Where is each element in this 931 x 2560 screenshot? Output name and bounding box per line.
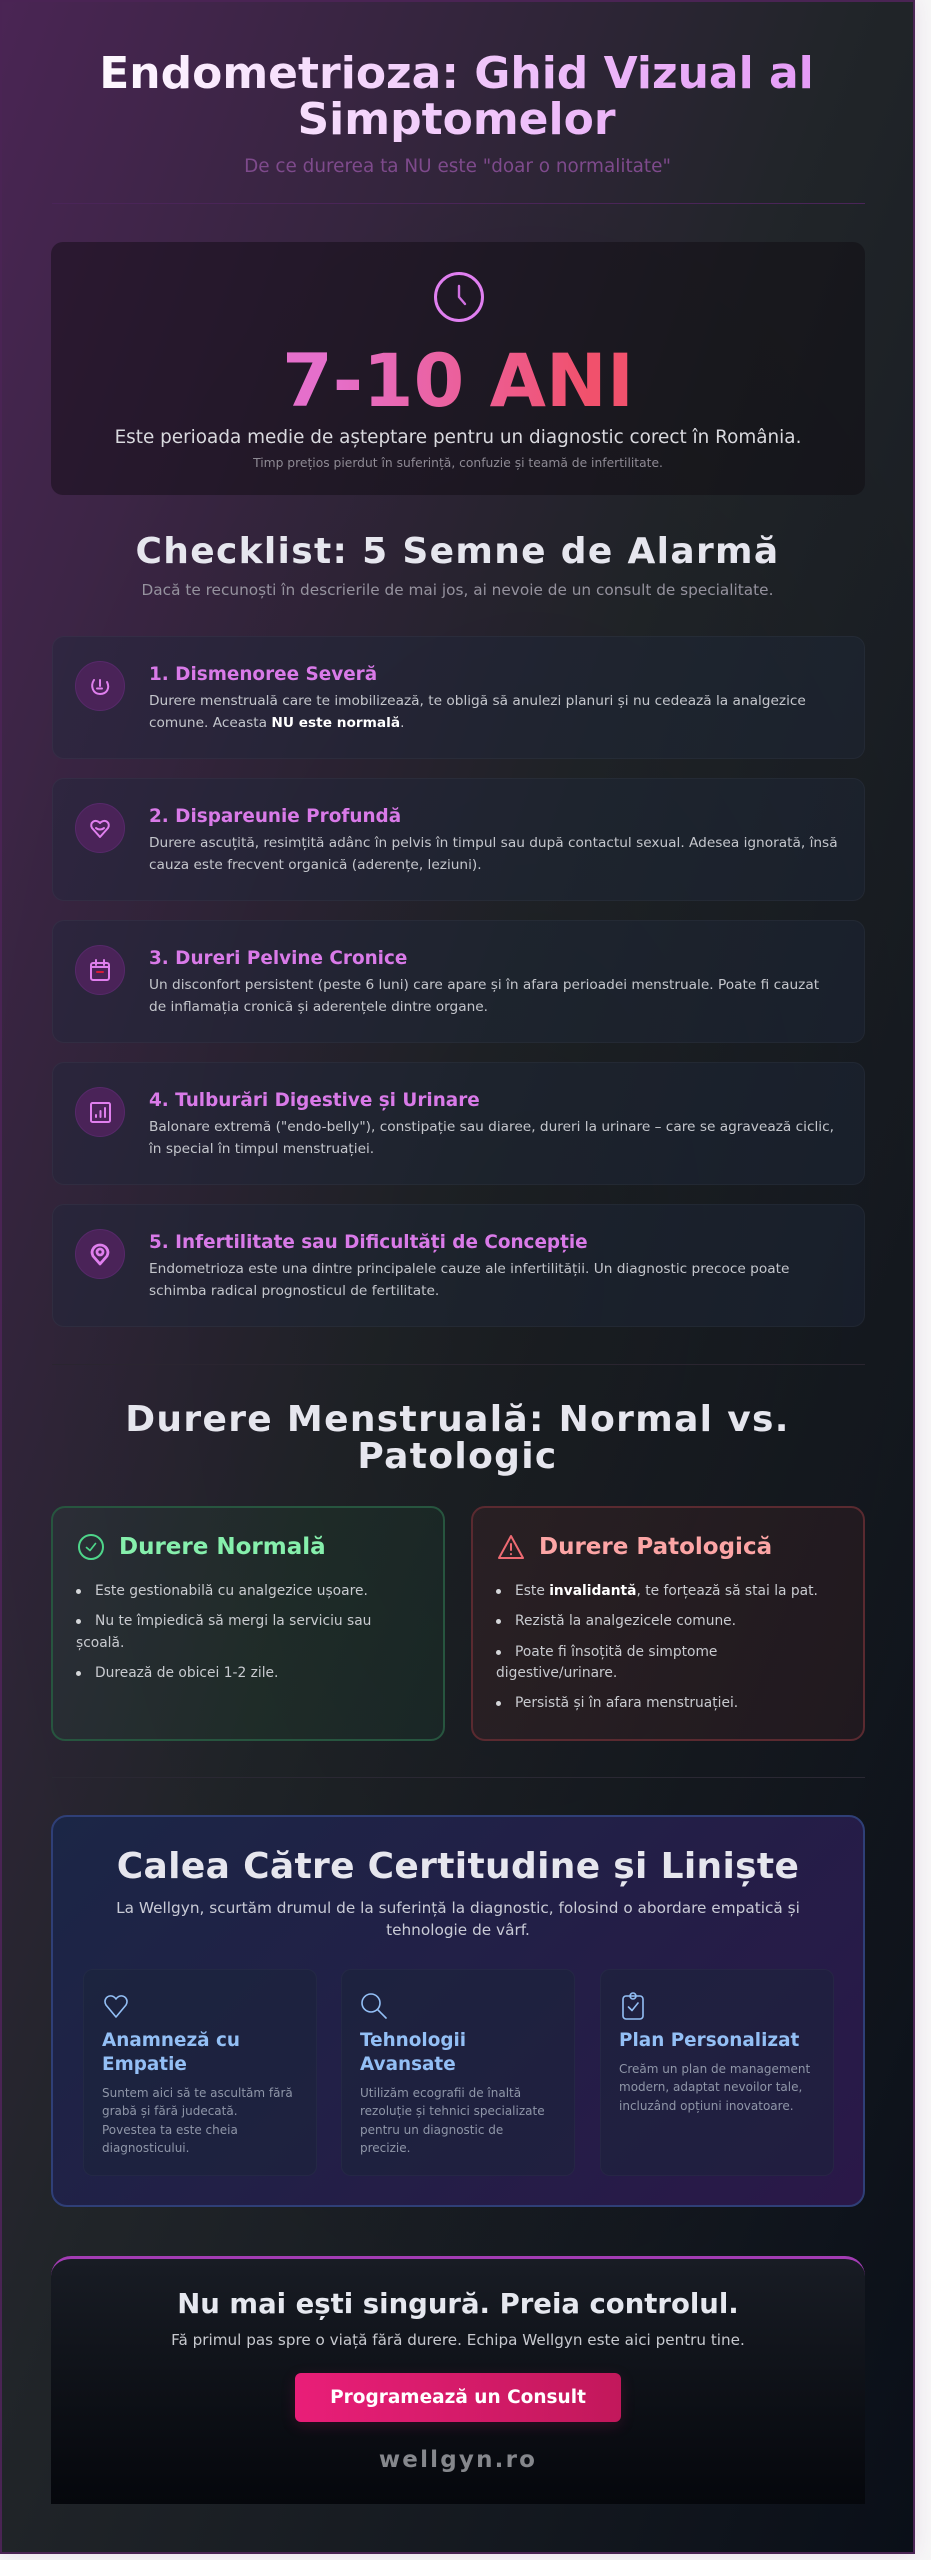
panel: pathological pain <box>471 1506 865 1741</box>
website: wellgyn.ro <box>379 2447 537 2473</box>
normal pain list: Durează de obicei 1-2 zile. <box>95 1665 278 1681</box>
icon: clipboard <box>622 1992 644 2020</box>
button: Programează un Consult <box>330 2387 586 2408</box>
anamnesis title: Empatie <box>102 2054 187 2075</box>
symptom 3 title: 3. Dureri Pelvine Cronice <box>149 948 407 968</box>
card: symptom 1 <box>52 636 865 759</box>
icon: clock <box>434 272 484 322</box>
symptom 3 text <box>149 977 819 1015</box>
normal pain list: Nu te împiedică să mergi la serviciu sau <box>95 1613 371 1629</box>
heading: checklist: Checklist: 5 Semne de Alarmă <box>135 531 780 572</box>
card: symptom 4 <box>52 1062 865 1185</box>
normal pain title: Durere Normală <box>119 1534 326 1560</box>
CTA text: Fă primul pas spre o viață fără durere. Echipa Wellgyn este aici pentru tine. <box>171 2331 745 2349</box>
section intro: tehnologie de vârf. <box>386 1920 530 1938</box>
section intro: La Wellgyn, scurtăm drumul de la suferință la diagnostic, folosind o abordare empatică și <box>116 1899 800 1917</box>
panel: normal pain <box>51 1506 445 1741</box>
anamnesis text: Povestea ta este cheia <box>102 2123 238 2137</box>
pathological pain list: digestive/urinare. <box>496 1665 617 1681</box>
panel: hero statistic <box>51 242 865 495</box>
card: symptom 2 <box>52 778 865 901</box>
plan text: incluzând opțiuni inovatoare. <box>619 2099 794 2113</box>
card: symptom 3 <box>52 920 865 1043</box>
big number <box>51 334 865 430</box>
symptom 5 text: Endometrioza este una dintre principalele cauze ale infertilității. Un diagnostic precoce poate <box>149 1261 789 1277</box>
anamnesis text <box>102 2086 293 2155</box>
big number: 7-10 ANI <box>282 339 634 424</box>
anamnesis title <box>102 2030 240 2075</box>
symptom 1 title: 1. Dismenoree Severă <box>149 664 377 684</box>
technology title: Tehnologii <box>360 2030 466 2051</box>
CTA heading: Nu mai ești singură. Preia controlul. <box>177 2288 739 2320</box>
technology text: Utilizăm ecografii de înaltă <box>360 2086 521 2100</box>
symptom 4 text: în special în timpul menstruației. <box>149 1141 374 1157</box>
subtitle: De ce durerea ta NU este "doar o normalitate" <box>244 156 671 177</box>
section intro <box>116 1899 800 1938</box>
card: anamnesis <box>83 1969 317 2176</box>
pathological pain list <box>496 1583 818 1711</box>
normal pain list: Este gestionabilă cu analgezice ușoare. <box>95 1583 368 1599</box>
icon: calendar <box>75 945 125 995</box>
anamnesis text: Suntem aici să te ascultăm fără <box>102 2086 293 2100</box>
hero caption: Este perioada medie de așteptare pentru un diagnostic corect în România. <box>115 427 801 448</box>
symptom 3 text: de inflamația cronică și aderențele dintre organe. <box>149 999 488 1015</box>
anamnesis text: grabă și fără judecată. <box>102 2104 238 2118</box>
technology title: Avansate <box>360 2054 456 2075</box>
card: personal plan <box>600 1969 834 2176</box>
icon: fertility <box>75 1229 125 1279</box>
symptom 1 text <box>149 693 806 731</box>
pathological pain list: Rezistă la analgezicele comune. <box>515 1613 736 1629</box>
pathological pain list: Este invalidantă, te forțează să stai la pat. <box>515 1583 818 1599</box>
icon: warning triangle <box>498 1535 524 1559</box>
pathological pain list: Poate fi însoțită de simptome <box>515 1644 717 1660</box>
technology text: rezoluție și tehnici specializate <box>360 2104 545 2118</box>
card: symptom 5 <box>52 1204 865 1327</box>
heading: normal vs pathological: Patologic <box>357 1436 558 1476</box>
symptom 2 text: Durere ascuțită, resimțită adânc în pelvis în timpul sau după contactul sexual. Adesea ignorată, însă <box>149 835 838 851</box>
symptom 2 text: cauza este frecvent organică (aderențe, leziuni). <box>149 857 482 873</box>
symptom 1 text: comune. Aceasta NU este normală. <box>149 715 404 731</box>
symptom 4 text: Balonare extremă ("endo-belly"), constipație sau diaree, dureri la urinare – care se agravează ciclic, <box>149 1119 834 1135</box>
normal pain list: școală. <box>76 1635 124 1651</box>
plan text: modern, adaptat nevoilor tale, <box>619 2080 802 2094</box>
plan text: Creăm un plan de management <box>619 2062 810 2076</box>
symptom 4 title: 4. Tulburări Digestive și Urinare <box>149 1090 480 1110</box>
symptom 5 text <box>149 1261 789 1299</box>
heading: normal vs pathological: Durere Menstruală: Normal vs. <box>125 1399 790 1440</box>
hero note: Timp prețios pierdut în suferință, confuzie și teamă de infertilitate. <box>253 456 663 470</box>
anamnesis title: Anamneză cu <box>102 2030 240 2051</box>
symptom 5 text: schimba radical prognosticul de fertilitate. <box>149 1283 439 1299</box>
symptom 2 title: 2. Dispareunie Profundă <box>149 806 401 826</box>
symptom 4 text <box>148 1119 834 1157</box>
panel: call to action <box>51 2256 865 2504</box>
anamnesis text: diagnosticului. <box>102 2141 189 2155</box>
button <box>295 2373 621 2422</box>
symptom 1 text: Durere menstruală care te imobilizează, te obligă să anulezi planuri și nu cedează la analgezice <box>149 693 806 709</box>
technology title <box>360 2030 466 2075</box>
technology text <box>360 2086 545 2155</box>
technology text: precizie. <box>360 2141 410 2155</box>
pathological pain list: Persistă și în afara menstruației. <box>515 1695 738 1711</box>
title: Endometrioza: Ghid Vizual al <box>99 48 814 99</box>
icon: heart <box>75 803 125 853</box>
technology text: pentru un diagnostic de <box>360 2123 503 2137</box>
heading: path to certainty: Calea Către Certitudine și Liniște <box>117 1846 799 1887</box>
pathological pain title: Durere Patologică <box>539 1534 772 1560</box>
checklist intro: Dacă te recunoști în descrierile de mai jos, ai nevoie de un consult de specialitate. <box>142 581 773 599</box>
symptom 5 title: 5. Infertilitate sau Dificultăți de Concepție <box>149 1232 588 1252</box>
symptom 3 text: Un disconfort persistent (peste 6 luni) care apare și în afara perioadei menstruale. Poate fi cauzat <box>149 977 819 993</box>
plan title: Plan Personalizat <box>619 2030 799 2051</box>
panel: path to certainty <box>51 1815 865 2207</box>
heading: normal vs pathological <box>125 1399 790 1476</box>
icon: pain <box>75 661 125 711</box>
title: Simptomelor <box>297 94 616 144</box>
normal pain list <box>76 1583 371 1681</box>
symptom 2 text <box>149 835 838 873</box>
title <box>50 51 863 142</box>
plan text <box>619 2062 810 2113</box>
icon: magnifier <box>361 1993 387 2019</box>
card: technology <box>341 1969 575 2176</box>
icon: chart <box>75 1087 125 1137</box>
icon: heart outline <box>104 1995 128 2018</box>
icon: check circle <box>78 1534 104 1560</box>
